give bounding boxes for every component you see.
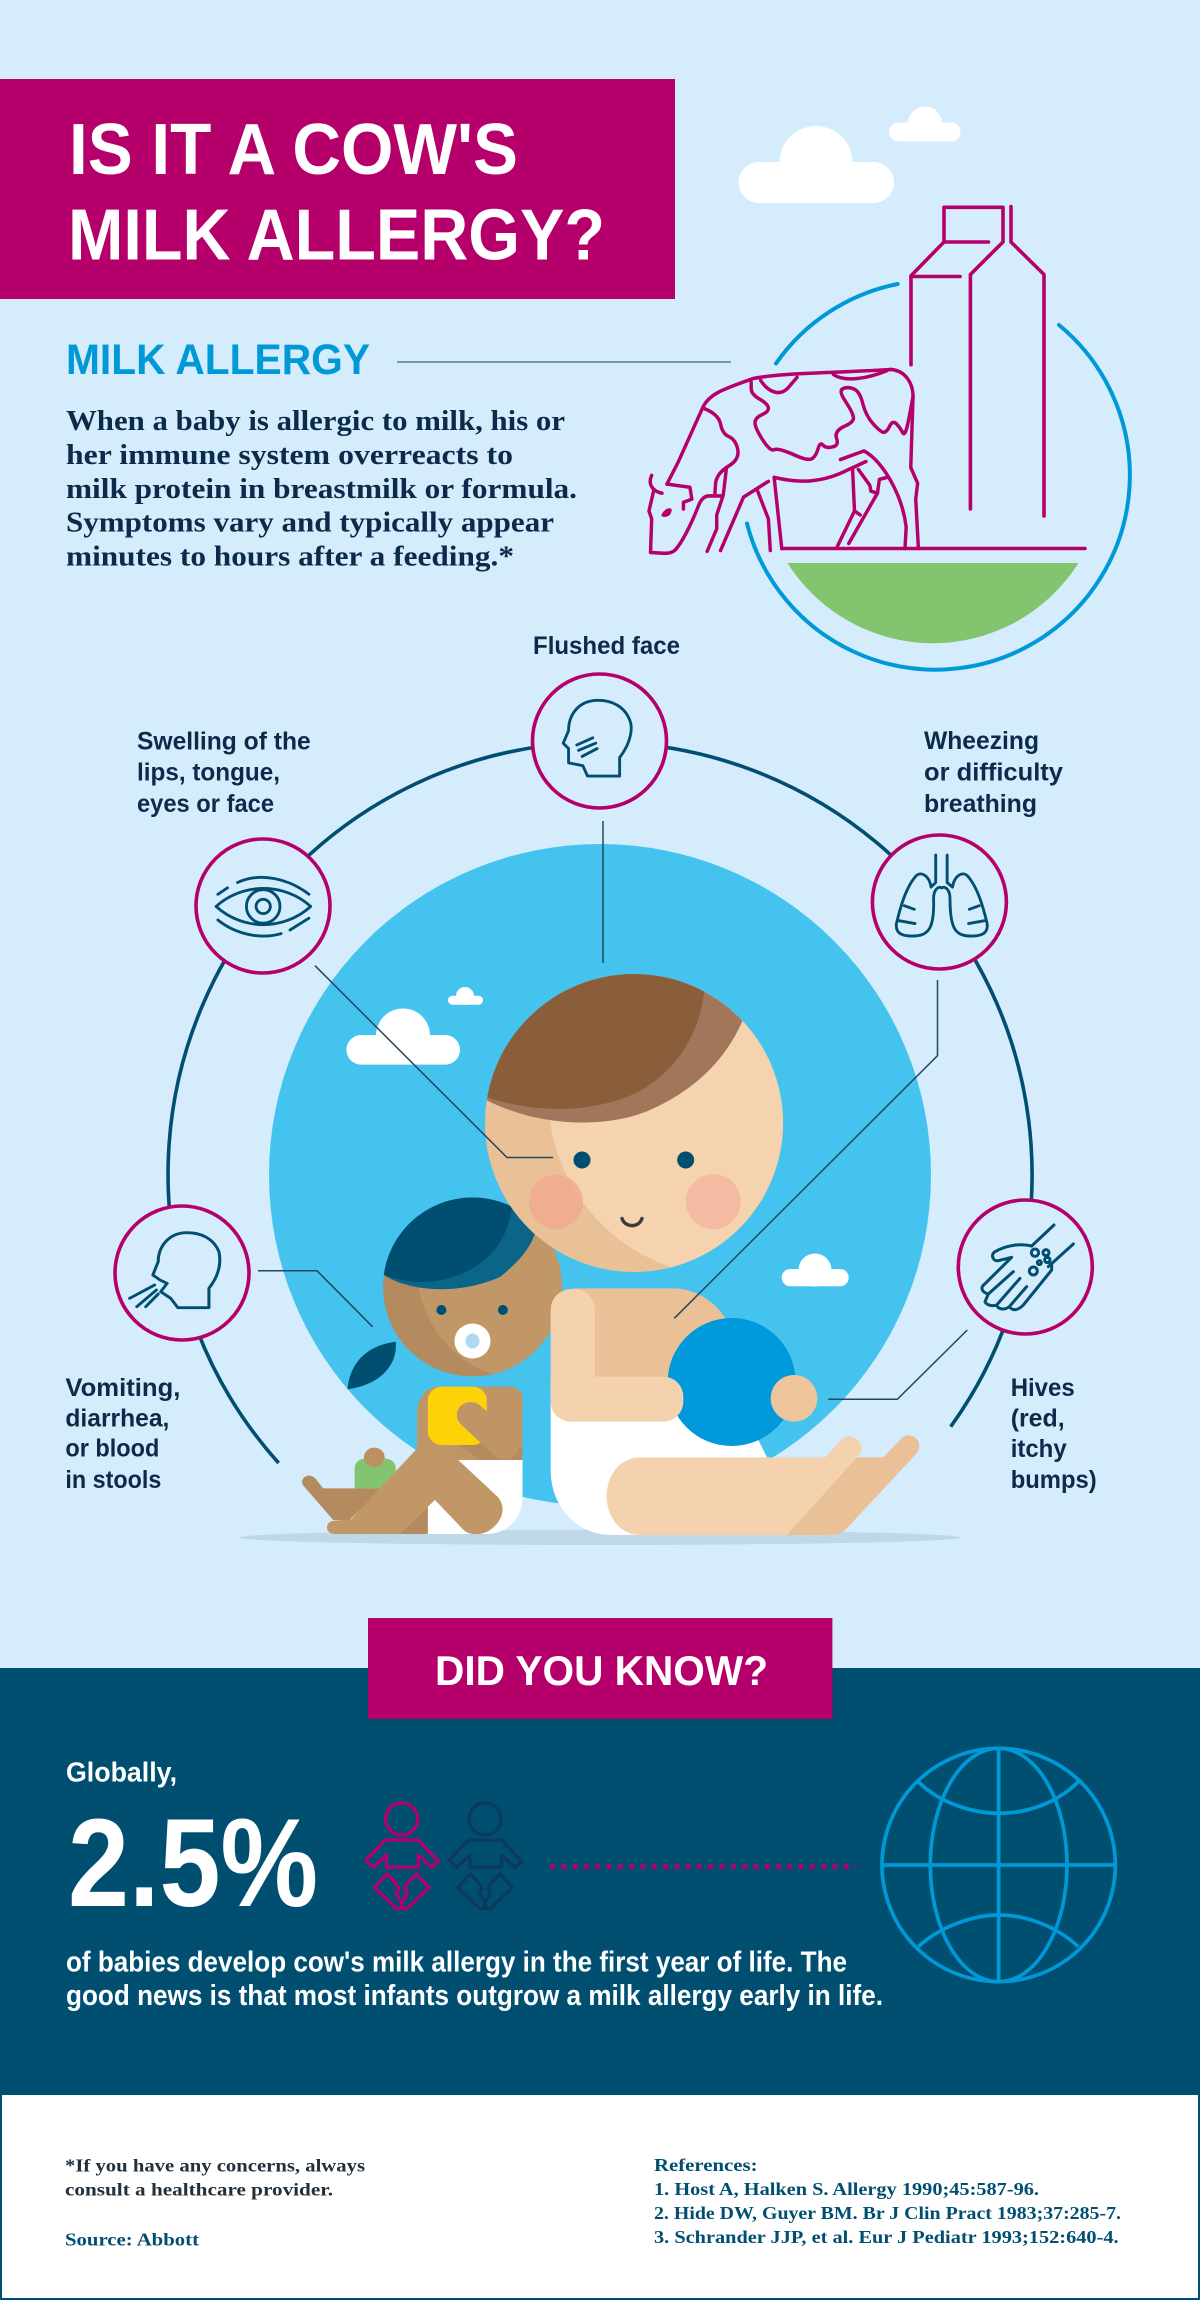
diaper: [428, 1460, 522, 1534]
torso: [560, 1288, 727, 1417]
symptoms ring: [168, 742, 1032, 1463]
did you know banner: [368, 1618, 832, 1719]
symptom: vomiting: [65, 1206, 249, 1494]
symptom: wheezing: breathing: [924, 790, 1037, 818]
symptom: swelling: Swelling of the: [137, 727, 311, 755]
symptom: hives: bumps): [1011, 1466, 1097, 1494]
icon: hand with hives: [982, 1225, 1073, 1310]
references: [654, 2155, 1121, 2247]
far hand: [771, 1375, 817, 1422]
icon: two babies: [366, 1803, 522, 1909]
statistic text: Globally,: [66, 1757, 177, 1788]
large baby illustration: [470, 913, 919, 1535]
cow line drawing: [649, 369, 918, 553]
symptom: vomiting: in stools: [65, 1466, 161, 1494]
references: 3. Schrander JJP, et al. Eur J Pediatr 1993;152:640-4.: [654, 2227, 1119, 2247]
footnote: [65, 2156, 365, 2250]
smile: [622, 1218, 642, 1226]
title banner: [0, 79, 675, 299]
statistic text: good news is that most infants outgrow a milk allergy early in life.: [66, 1980, 883, 2012]
symptom: vomiting: diarrhea,: [65, 1405, 169, 1433]
torso: [417, 1387, 522, 1467]
title banner: MILK ALLERGY?: [68, 196, 605, 276]
arm: [551, 1289, 595, 1422]
symptom: hives: itchy: [1011, 1435, 1067, 1463]
cheeks: [529, 1175, 583, 1229]
statistic text: [66, 1757, 883, 2012]
clouds top: [738, 106, 960, 203]
title banner: IS IT A COW'S: [69, 110, 518, 190]
symptom: hives: Hives: [1011, 1374, 1075, 1402]
panel: footer: [1, 2094, 1199, 2299]
footnote: *If you have any concerns, always: [65, 2156, 365, 2176]
green bottle: [355, 1458, 396, 1488]
symptom: swelling: lips, tongue,: [137, 759, 280, 787]
hand on toy: [471, 1415, 505, 1447]
ground shadow: [240, 1530, 960, 1545]
heading: milk allergy: MILK ALLERGY: [66, 336, 370, 384]
symptom: flushed face: [532, 632, 680, 808]
symptom: wheezing: or difficulty: [924, 759, 1063, 787]
symptom: swelling: [137, 727, 330, 973]
statistic text: of babies develop cow's milk allergy in the first year of life. The: [66, 1947, 847, 1979]
references: 1. Host A, Halken S. Allergy 1990;45:587-96.: [654, 2179, 1039, 2199]
footnote: consult a healthcare provider.: [65, 2180, 333, 2200]
green grass: [788, 563, 1078, 643]
symptom: swelling: eyes or face: [137, 790, 274, 818]
pacifier: [454, 1324, 490, 1358]
clouds in circle: [346, 987, 849, 1286]
intro text block: [66, 406, 577, 572]
diaper: [551, 1383, 767, 1535]
intro text block: milk protein in breastmilk or formula.: [66, 474, 577, 505]
icon: lungs: [896, 855, 987, 936]
panel: did you know: [0, 1618, 1200, 2094]
intro text block: minutes to hours after a feeding.*: [66, 542, 514, 572]
references: References:: [654, 2155, 758, 2175]
ball: [668, 1318, 796, 1446]
symptom: wheezing: [872, 727, 1063, 969]
cow and milk carton illustration: [649, 206, 1130, 670]
references: 2. Hide DW, Guyer BM. Br J Clin Pract 1983;37:285-7.: [654, 2203, 1121, 2223]
intro text block: her immune system overreacts to: [66, 440, 513, 471]
dotted connector: [550, 1864, 856, 1869]
far leg: [770, 1435, 919, 1535]
near leg: [399, 1507, 428, 1534]
icon: head with flush marks: [563, 700, 631, 776]
icon: swollen eye: [216, 877, 311, 936]
symptom: hives: (red,: [1011, 1405, 1065, 1433]
did you know banner: DID YOU KNOW?: [435, 1647, 768, 1694]
symptom: vomiting: or blood: [65, 1435, 159, 1463]
symptom: hives: [958, 1200, 1097, 1494]
statistic text: 2.5%: [68, 1794, 318, 1933]
milk carton: [782, 206, 1085, 548]
small baby illustration: [302, 1198, 562, 1534]
hair tuft: [348, 1342, 396, 1389]
intro text block: When a baby is allergic to milk, his or: [66, 406, 565, 437]
far leg: [302, 1476, 383, 1520]
symptom: wheezing: Wheezing: [924, 727, 1039, 755]
central blue circle: [269, 844, 931, 1506]
symptom: vomiting: Vomiting,: [65, 1374, 180, 1402]
icon: globe: [882, 1748, 1117, 1982]
symptom: flushed face: Flushed face: [533, 632, 680, 660]
leader lines: [258, 821, 967, 1399]
blue ring: [747, 284, 1130, 670]
footnote: Source: Abbott: [65, 2230, 199, 2250]
small baby head: [383, 1198, 562, 1376]
large baby head: [485, 974, 783, 1272]
intro text block: Symptoms vary and typically appear: [66, 508, 554, 538]
icon: vomiting head: [130, 1233, 220, 1308]
eyes: [574, 1152, 590, 1168]
near leg: [607, 1436, 862, 1535]
block toy: [428, 1387, 487, 1445]
